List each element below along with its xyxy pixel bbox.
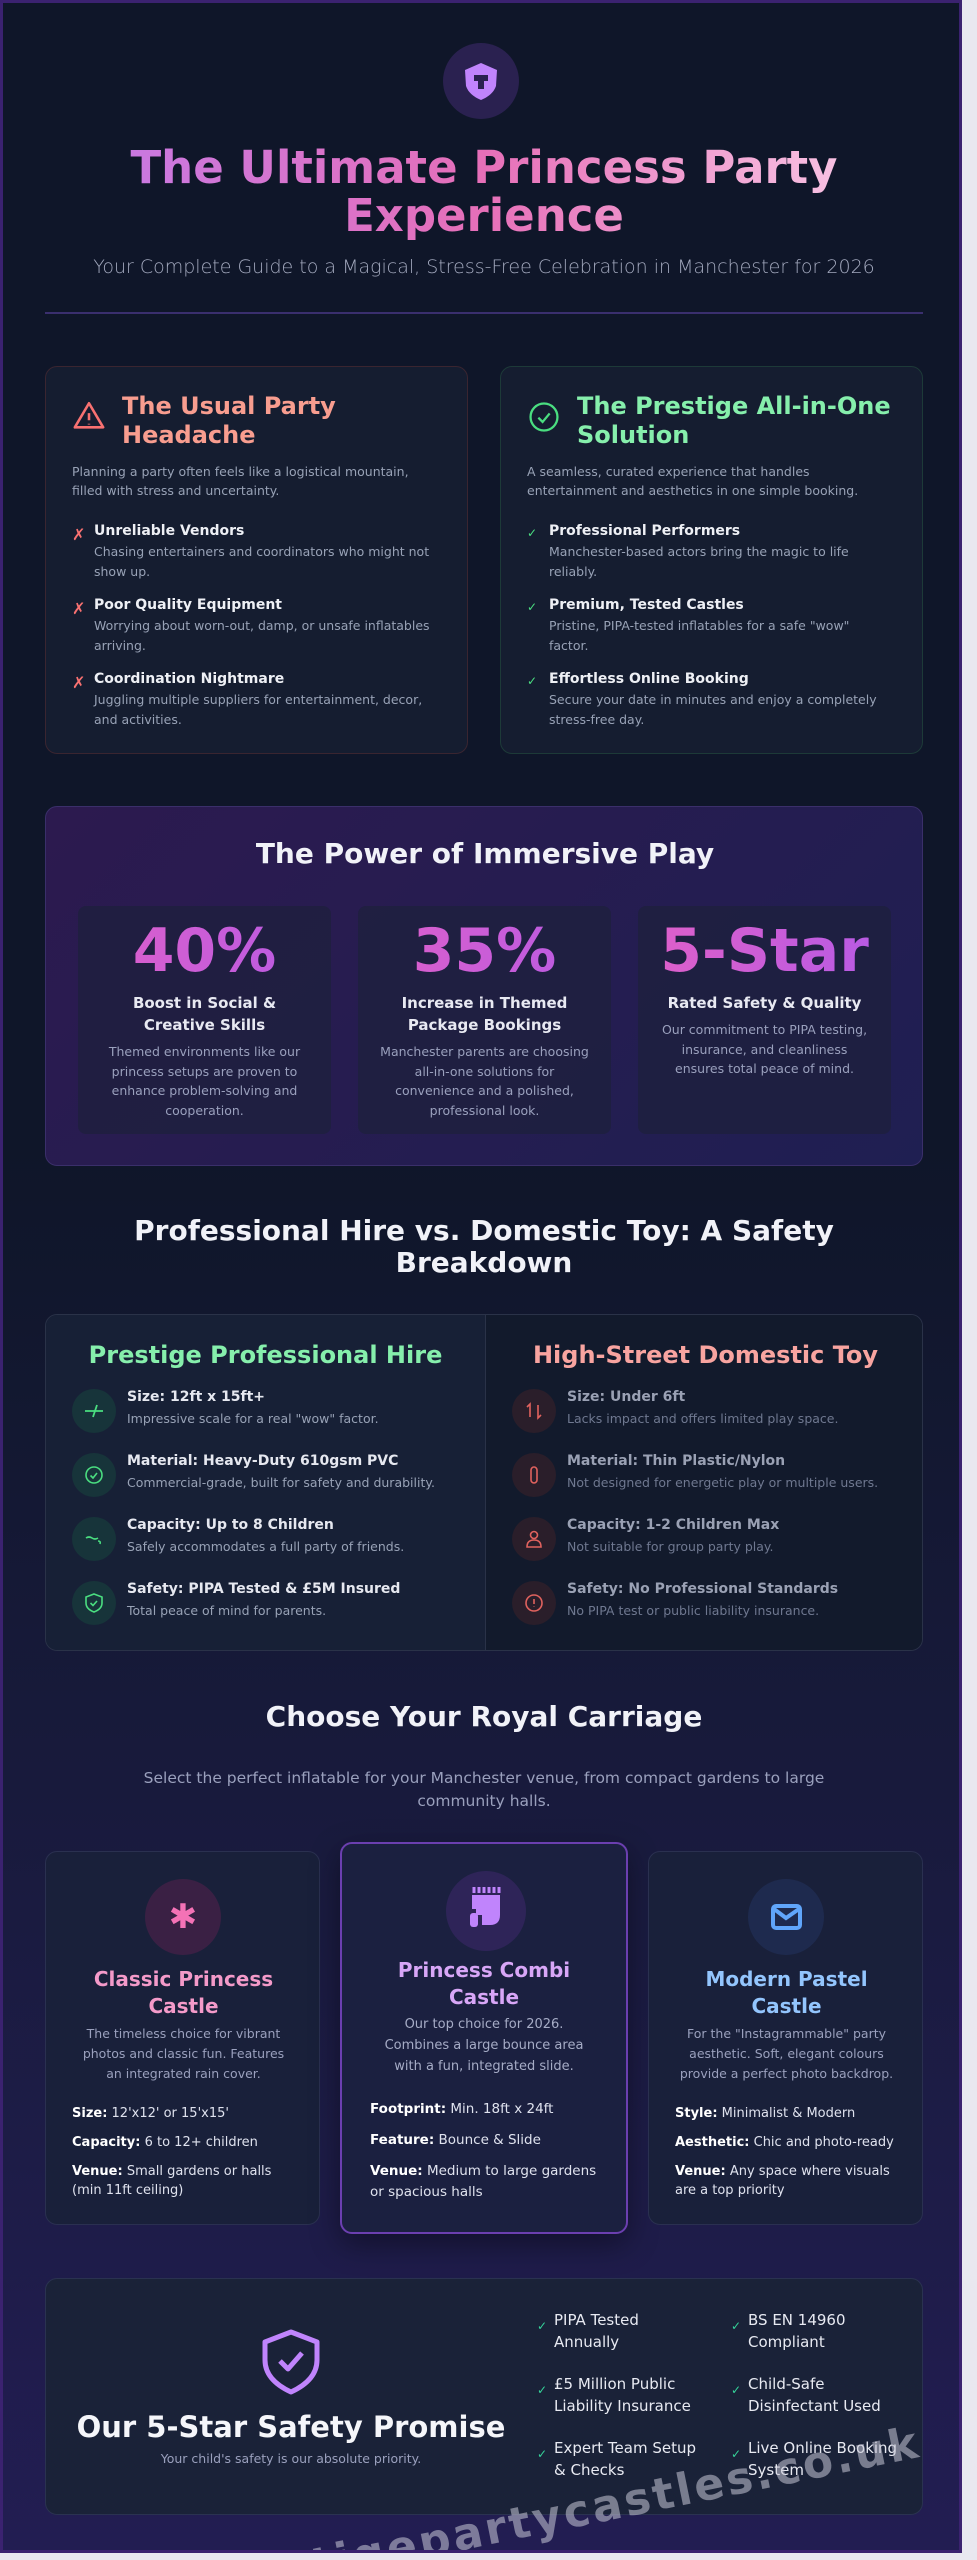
stat: 40%: Themed environments like our princess setups are proven to enhance problem-solving and cooperation.	[109, 1044, 300, 1118]
panel: safety promise	[45, 2278, 923, 2515]
column: domestic toy: Capacity: 1-2 Children Max	[567, 1517, 779, 1533]
subtitle: Your Complete Guide to a Magical, Stress-Free Celebration in Manchester for 2026	[93, 256, 875, 278]
panel: usual party headache	[45, 366, 468, 754]
list: benefits: Secure your date in minutes and enjoy a completely stress-free day.	[549, 692, 877, 726]
list: problems: Unreliable Vendors	[94, 523, 244, 539]
list: benefits: ✓	[527, 674, 537, 688]
checklist: ✓	[731, 2447, 741, 2461]
column: professional hire: Safety: PIPA Tested & £5M Insured	[127, 1581, 400, 1597]
list: benefits: Professional Performers	[549, 523, 740, 539]
list: problems: ✗	[72, 525, 85, 544]
card: princess combi castle: Castle	[449, 1985, 519, 2009]
heading	[122, 392, 336, 449]
column: professional hire: Material: Heavy-Duty 610gsm PVC	[127, 1453, 398, 1469]
stat: 35%: Increase in Themed	[402, 994, 567, 1012]
panel: safety promise: ✓	[537, 2383, 547, 2397]
heading	[577, 392, 891, 449]
stat: 5-Star: Our commitment to PIPA testing, insurance, and cleanliness ensures total peace of mind.	[662, 1022, 867, 1076]
heading: Headache	[122, 421, 256, 449]
title: The Ultimate Princess Party	[130, 141, 838, 194]
column: domestic toy: Not suitable for group party play.	[567, 1539, 774, 1554]
card: classic princess castle: Size: 12'x12' or 15'x15'	[72, 2106, 229, 2121]
stat: 5-Star: 5-Star	[660, 916, 869, 986]
list: benefits: ✓	[527, 526, 537, 540]
column: professional hire: Prestige Professional Hire	[89, 1341, 442, 1369]
list: benefits: ✓	[527, 600, 537, 614]
column: professional hire: Total peace of mind for parents.	[127, 1603, 326, 1618]
heading: safety breakdown: Professional Hire vs. Domestic Toy: A Safety	[134, 1214, 834, 1247]
stat: 35%	[358, 906, 611, 1134]
stat: 40%: Creative Skills	[144, 1016, 265, 1034]
stat: 5-Star: Rated Safety & Quality	[668, 994, 861, 1012]
card: modern pastel castle: Venue: Any space where visuals are a top priority	[675, 2164, 890, 2198]
checklist: Disinfectant Used	[748, 2397, 881, 2415]
column: domestic toy	[485, 1315, 924, 1652]
icon: check circle	[529, 402, 559, 432]
panel: comparison	[45, 1314, 923, 1651]
title: Experience	[344, 189, 624, 242]
card: classic princess castle: Classic Princess	[94, 1967, 273, 1991]
stat: 40%: Boost in Social &	[133, 994, 276, 1012]
checklist: Compliant	[748, 2333, 825, 2351]
card: modern pastel castle	[648, 1851, 923, 2225]
column: domestic toy: Size: Under 6ft	[567, 1389, 685, 1405]
column: domestic toy: Not designed for energetic play or multiple users.	[567, 1475, 878, 1490]
column: professional hire: Safely accommodates a full party of friends.	[127, 1539, 404, 1554]
card: princess combi castle	[340, 1842, 628, 2234]
checklist: Live Online Booking	[748, 2439, 897, 2457]
card: modern pastel castle: For the "Instagrammable" party aesthetic. Soft, elegant colours provide a perfect photo backdrop.	[680, 2026, 893, 2081]
icon: header crest	[443, 43, 519, 119]
column: professional hire: Capacity: Up to 8 Children	[127, 1517, 334, 1533]
column: domestic toy: No PIPA test or public liability insurance.	[567, 1603, 819, 1618]
list: problems: ✗	[72, 673, 85, 692]
card: modern pastel castle: Style: Minimalist & Modern	[675, 2106, 855, 2121]
list: problems: Chasing entertainers and coordinators who might not show up.	[94, 544, 429, 578]
checklist: System	[748, 2461, 804, 2479]
card: classic princess castle: Castle	[148, 1994, 219, 2018]
card: classic princess castle: Venue: Small gardens or halls (min 11ft ceiling)	[72, 2164, 271, 2198]
panel: safety promise: ✓	[537, 2319, 547, 2333]
heading: safety breakdown: Breakdown	[396, 1246, 572, 1279]
checklist: BS EN 14960	[748, 2311, 846, 2329]
column: domestic toy: High-Street Domestic Toy	[533, 1341, 878, 1369]
checklist: ✓	[731, 2383, 741, 2397]
list: benefits: Effortless Online Booking	[549, 671, 749, 687]
column: domestic toy: Safety: No Professional Standards	[567, 1581, 838, 1597]
heading: The Prestige All-in-One	[577, 392, 891, 420]
list: problems: Juggling multiple suppliers for entertainment, decor, and activities.	[94, 692, 422, 726]
column: domestic toy: Lacks impact and offers limited play space.	[567, 1411, 838, 1426]
panel: prestige solution	[500, 366, 923, 754]
heading: The Power of Immersive Play	[256, 837, 714, 870]
stat: 35%: Manchester parents are choosing all-in-one solutions for convenience and a polished, professional look.	[380, 1044, 589, 1118]
heading: Our 5-Star Safety Promise	[77, 2410, 505, 2444]
card: classic princess castle: ✱	[169, 1897, 197, 1937]
checklist: Annually	[554, 2333, 619, 2351]
description: Planning a party often feels like a logistical mountain, filled with stress and uncertainty.	[72, 464, 409, 498]
column: professional hire: Commercial-grade, built for safety and durability.	[127, 1475, 435, 1490]
stat: 35%: Package Bookings	[408, 1016, 561, 1034]
checklist: Liability Insurance	[554, 2397, 691, 2415]
card: princess combi castle: Footprint: Min. 18ft x 24ft	[370, 2101, 553, 2117]
column: professional hire	[46, 1315, 485, 1652]
stat: 5-Star	[638, 906, 891, 1134]
card: classic princess castle	[45, 1851, 320, 2225]
card: princess combi castle: Princess Combi	[398, 1958, 570, 1982]
list: benefits: Premium, Tested Castles	[549, 597, 744, 613]
column: domestic toy: Material: Thin Plastic/Nylon	[567, 1453, 785, 1469]
list: benefits: Pristine, PIPA-tested inflatables for a safe "wow" factor.	[549, 618, 849, 652]
card: modern pastel castle: Modern Pastel	[705, 1967, 868, 1991]
list: problems	[72, 523, 430, 726]
column: professional hire: Size: 12ft x 15ft+	[127, 1389, 265, 1405]
icon: shield	[262, 2330, 320, 2394]
stat: 40%	[78, 906, 331, 1134]
list: problems: Poor Quality Equipment	[94, 597, 282, 613]
title	[63, 144, 905, 240]
list: problems: ✗	[72, 599, 85, 618]
card: classic princess castle: Capacity: 6 to 12+ children	[72, 2135, 258, 2150]
subheading: Select the perfect inflatable for your Manchester venue, from compact gardens to large community halls.	[144, 1769, 824, 1810]
list: benefits	[527, 523, 877, 726]
card: modern pastel castle: Castle	[751, 1994, 822, 2018]
stat: 35%: 35%	[413, 916, 556, 986]
list: benefits: Manchester-based actors bring the magic to life reliably.	[549, 544, 849, 578]
list: problems: Coordination Nightmare	[94, 671, 284, 687]
icon: warning	[74, 402, 104, 429]
card: modern pastel castle: Aesthetic: Chic and photo-ready	[675, 2135, 894, 2150]
checklist: PIPA Tested	[554, 2311, 639, 2329]
checklist: ✓	[731, 2319, 741, 2333]
heading: The Usual Party	[122, 392, 336, 420]
stat: 40%: 40%	[133, 916, 276, 986]
heading: safety breakdown	[134, 1214, 834, 1279]
heading: Solution	[577, 421, 689, 449]
checklist	[537, 2311, 897, 2479]
card: princess combi castle: Combines a large bounce area with a fun, integrated slide.	[385, 2038, 583, 2074]
checklist: Child-Safe	[748, 2375, 824, 2393]
subtext: Your child's safety is our absolute priority.	[161, 2451, 421, 2466]
checklist: £5 Million Public	[554, 2375, 675, 2393]
heading: royal carriage: Choose Your Royal Carriage	[266, 1700, 702, 1733]
column: professional hire: Impressive scale for a real "wow" factor.	[127, 1411, 379, 1426]
description: A seamless, curated experience that handles entertainment and aesthetics in one simple booking.	[527, 464, 858, 498]
panel: safety promise: ✓	[537, 2447, 547, 2461]
card: princess combi castle: Feature: Bounce & Slide	[370, 2132, 541, 2148]
card: princess combi castle: Venue: Medium to large gardens or spacious halls	[370, 2163, 596, 2200]
checklist: Expert Team Setup	[554, 2439, 696, 2457]
card: princess combi castle: Our top choice for 2026.	[405, 2017, 563, 2032]
panel: power of immersive play	[45, 806, 923, 1166]
card: classic princess castle: The timeless choice for vibrant photos and classic fun. Features an integrated rain cover.	[83, 2026, 284, 2081]
checklist: & Checks	[554, 2461, 624, 2479]
list: problems: Worrying about worn-out, damp, or unsafe inflatables arriving.	[94, 618, 430, 652]
